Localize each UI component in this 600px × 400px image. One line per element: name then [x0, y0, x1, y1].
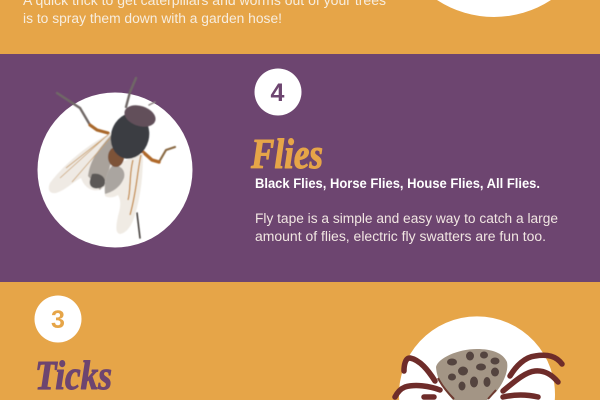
fly tip text: Fly tape is a simple and easy way to catch a large [255, 211, 558, 226]
number badge: 3: 3 [51, 306, 65, 334]
fly abdomen [108, 147, 124, 167]
tick legs [395, 355, 562, 397]
caterpillar tip text [23, 0, 386, 26]
number badge: 4 [254, 68, 302, 116]
panel: flies [0, 54, 600, 282]
subheading: fly types: Black Flies, Horse Flies, House Flies, All Flies. [255, 176, 540, 191]
number badge: 3 [34, 296, 82, 342]
panel: ticks [0, 282, 600, 400]
caterpillar tip text: is to spray them down with a garden hose! [23, 11, 282, 26]
fly head [122, 102, 158, 130]
number badge: 4: 4 [271, 79, 285, 107]
tick rim [438, 378, 496, 399]
fly legs [57, 78, 175, 238]
tick body markings [447, 352, 500, 390]
image circle: caterpillars (cropped) [437, 0, 551, 17]
fly thorax [106, 109, 154, 163]
fly wings [49, 133, 113, 193]
image: fly in white circle [38, 78, 192, 248]
panel: caterpillars (top, cropped) [0, 0, 600, 54]
heading: Flies: Flies [250, 132, 323, 178]
tick body [436, 349, 507, 400]
fly tip text [255, 211, 558, 244]
fly tip text: amount of flies, electric fly swatters are fun too. [255, 229, 546, 244]
heading: Ticks: Ticks [35, 352, 112, 398]
image: tick in white circle [395, 316, 562, 400]
